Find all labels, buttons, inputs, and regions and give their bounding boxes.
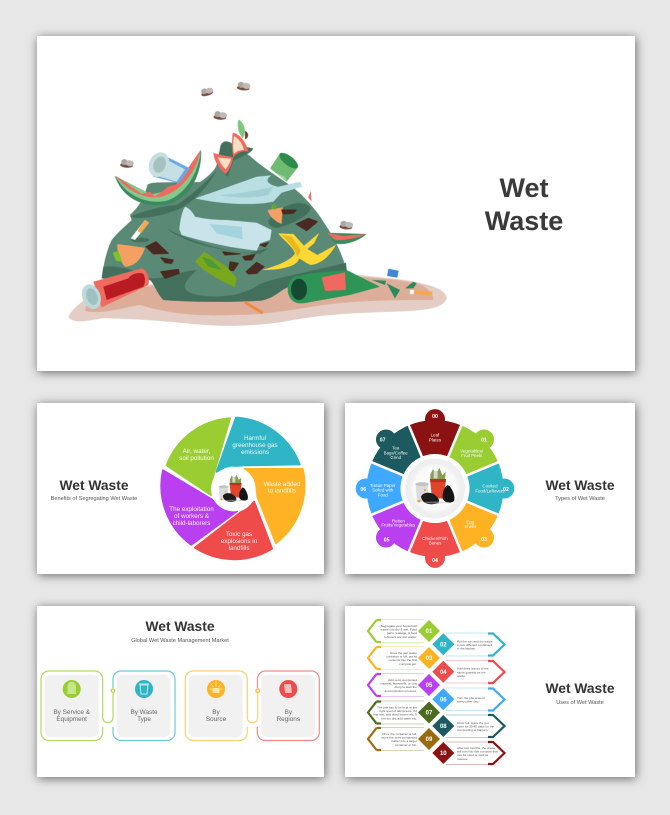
segment: landfills: [245, 469, 305, 543]
left step text: parts, leakage, & food: [387, 631, 417, 635]
wheel labels: Egg: [466, 519, 475, 524]
pie chart: benefits: to landfills: [268, 488, 296, 494]
wheel labels: Grind: [390, 455, 402, 460]
left step text: Once the wet waste: [390, 651, 417, 655]
right step text: composting to happen.: [457, 728, 488, 732]
heading: market: Wet Waste: [146, 619, 215, 634]
pie chart: benefits: The exploitation: [169, 506, 214, 513]
left step text: container or bin.: [395, 743, 417, 747]
brown scraps: [146, 210, 317, 278]
heading: market: Global Wet Waste Management Market: [131, 638, 229, 644]
icon: service and equipment: [63, 680, 81, 698]
wheel labels: Bags/Coffee: [384, 450, 408, 455]
card labels: By Service &: [53, 709, 91, 716]
icon: waste type: [135, 680, 153, 698]
pie chart: benefits: Toxic gas: [226, 531, 252, 538]
pie chart: benefits: soil pollution: [179, 455, 214, 462]
wheel labels: Soiled with: [372, 488, 394, 493]
wheel numbers: 05: [384, 537, 390, 543]
flies: [120, 81, 353, 230]
heading: benefits: [51, 478, 137, 502]
diamond numbers: 09: [426, 737, 433, 743]
left step text: dung to start the: [395, 685, 417, 689]
green mush: [195, 252, 237, 287]
outlines and connectors: [41, 671, 319, 740]
wheel labels: Plates: [429, 438, 442, 442]
wheel numbers: 07: [380, 438, 386, 444]
watermelon left: [115, 149, 201, 205]
wheel: types of wet waste: [356, 409, 514, 568]
green bottle: [288, 270, 380, 303]
pie chart: benefits: [161, 418, 305, 559]
diamond numbers: 07: [426, 711, 433, 717]
pie chart: benefits: Harmful: [244, 435, 266, 442]
heading: uses: Wet Waste: [546, 681, 615, 696]
wheel labels: Bones: [429, 541, 442, 546]
card group: market segments: [41, 671, 319, 740]
diamond numbers: 02: [440, 642, 447, 648]
cards background: [45, 675, 315, 737]
card labels: Regions: [277, 716, 300, 723]
right step text: can be used or sold as: [457, 753, 489, 757]
green can top: [270, 150, 300, 182]
pie chart: benefits: landfills: [228, 545, 250, 552]
card labels: Equipment: [56, 716, 87, 723]
diagram: uses of wet waste: [368, 620, 504, 764]
card labels: [53, 709, 300, 723]
wheel numbers: 02: [503, 487, 509, 493]
diamond numbers: 08: [440, 724, 447, 730]
left step text: matter into a larger: [391, 739, 417, 743]
diamond numbers: 04: [440, 670, 447, 676]
left step text: it is too dry, add water etc.: [381, 716, 417, 720]
segment: exploitation: [161, 470, 237, 545]
left step text: Segregate your household: [381, 624, 417, 628]
panel: main illustration slide: [37, 36, 635, 371]
pie chart: benefits: of workers &: [174, 513, 210, 520]
wheel labels: Fruits/Vegetables: [381, 523, 416, 528]
wheel labels: Rotten: [392, 518, 405, 523]
wheel labels: Tissue Paper: [370, 483, 396, 488]
right step text: will turn into rich compost that: [457, 750, 498, 754]
red can: [79, 268, 149, 312]
left step text: right level of dampness. If it: [379, 709, 417, 713]
right step text: same quantity as the: [457, 670, 486, 674]
illustration: waste pile: [68, 81, 447, 326]
icon: source: [207, 680, 225, 698]
heading: types: Wet Waste: [546, 478, 615, 493]
heading: uses: Uses of Wet Waste: [556, 700, 604, 706]
panel: uses slide: [345, 606, 635, 777]
card labels: By: [212, 709, 221, 716]
right step text: in two different containers: [457, 643, 493, 647]
left step text: compost pot.: [399, 662, 417, 666]
wheel numbers: 04: [432, 558, 438, 564]
left step text: has wet, add dried leaves etc. If: [373, 713, 417, 717]
right watermelon: [308, 191, 367, 244]
segment: pollution: [167, 418, 230, 495]
banana peel: [262, 233, 336, 270]
panel: types slide: [345, 403, 635, 574]
left step text: contents into the first: [388, 658, 417, 662]
pie chart: benefits: greenhouse gas: [232, 442, 278, 449]
wheel labels: Leaf: [431, 432, 440, 438]
food scraps: [113, 204, 283, 267]
icon: regions: [279, 680, 297, 698]
right step text: in the kitchen.: [457, 647, 476, 651]
diamond numbers: 01: [426, 629, 433, 635]
right step text: [457, 640, 498, 761]
pie chart: benefits: explosions in: [221, 538, 258, 545]
wheel numbers: 01: [481, 437, 487, 443]
segment: toxic gas: [195, 502, 272, 559]
wheel labels: Food: [378, 492, 388, 497]
wheel labels: Vegetables/: [460, 448, 484, 453]
heading: types: [546, 478, 615, 502]
left step text: The pile has to be kept at the: [377, 706, 417, 710]
wheel labels: Chicken/Fish: [422, 536, 448, 541]
heading: benefits: Benefits of Segregating Wet Waste: [51, 496, 137, 502]
left step text: material, buttermilk, or cow: [380, 682, 418, 686]
pie chart: benefits: Air, water,: [183, 448, 211, 455]
pie chart: benefits: emissions: [241, 449, 269, 456]
left step text: move the semi composted: [381, 736, 417, 740]
cap and leaves: [372, 269, 417, 298]
wheel labels: Tea: [392, 445, 400, 450]
apple core: [213, 119, 249, 174]
left step text: leftovers are wet waste.: [384, 635, 417, 639]
segments: [356, 409, 514, 568]
plastic bag: [195, 175, 302, 204]
left step text: [373, 624, 418, 747]
right step text: open for 30-45 days for the: [457, 725, 494, 729]
wheel numbers: 03: [481, 537, 487, 543]
right step text: manure.: [457, 757, 468, 761]
diamond numbers: [426, 629, 447, 757]
wheel numbers: [360, 414, 509, 564]
right arrow outlines: [446, 633, 504, 764]
title: Wet Waste: [485, 173, 563, 236]
wheel numbers: 00: [432, 414, 438, 420]
title: Wet Waste: Waste: [485, 206, 563, 236]
card labels: By Waste: [130, 709, 158, 716]
left step text: decomposition process.: [384, 689, 417, 693]
diamond numbers: 10: [440, 751, 447, 757]
card labels: By: [285, 709, 293, 716]
right step text: every other day.: [457, 699, 479, 703]
heading: market: [131, 619, 229, 644]
right step text: Once full, leave the pot: [457, 721, 489, 725]
wheel labels: Shells: [464, 524, 477, 529]
right step text: waste.: [457, 674, 466, 678]
card labels: Type: [137, 716, 151, 723]
card labels: Source: [206, 716, 227, 723]
right step text: Add dried leaves of the: [457, 667, 489, 671]
left step text: Once the container is full,: [382, 732, 417, 736]
left step text: Add semi composted: [388, 678, 417, 682]
heading: types: Types of Wet Waste: [555, 496, 605, 502]
diamond numbers: 05: [426, 683, 433, 689]
pie chart: benefits: child-laborers: [173, 520, 210, 527]
pie chart: benefits: Waste added: [264, 481, 301, 488]
can behind melon: [145, 149, 190, 183]
wheel numbers: 06: [360, 487, 366, 493]
left arrow outlines: [368, 620, 424, 750]
wheel labels: [370, 432, 505, 546]
plastic bottle: [179, 207, 272, 251]
left step text: container is full, put its: [386, 655, 417, 659]
heading: benefits: Wet Waste: [60, 478, 129, 493]
right step text: Turn the pile around: [457, 696, 485, 700]
panel: market slide: [37, 606, 324, 777]
right step text: Put the wet and dry waste: [457, 640, 493, 644]
diamond numbers: 03: [426, 656, 433, 662]
cigarettes: [131, 220, 433, 314]
segment: greenhouse gas: [217, 418, 300, 472]
right step text: After two months, the waste: [457, 746, 495, 750]
diamond numbers: 06: [440, 698, 447, 704]
title: Wet Waste: Wet: [499, 173, 549, 203]
left step text: waste into dry & wet. Food: [381, 628, 417, 632]
heading: uses: [546, 681, 615, 706]
wheel labels: Cooked: [482, 484, 498, 489]
diamonds: [418, 620, 454, 764]
panel: benefits slide: [37, 403, 324, 574]
wheel labels: Food/Leftovers: [475, 488, 505, 493]
wheel labels: Fruit Peels: [461, 453, 483, 458]
